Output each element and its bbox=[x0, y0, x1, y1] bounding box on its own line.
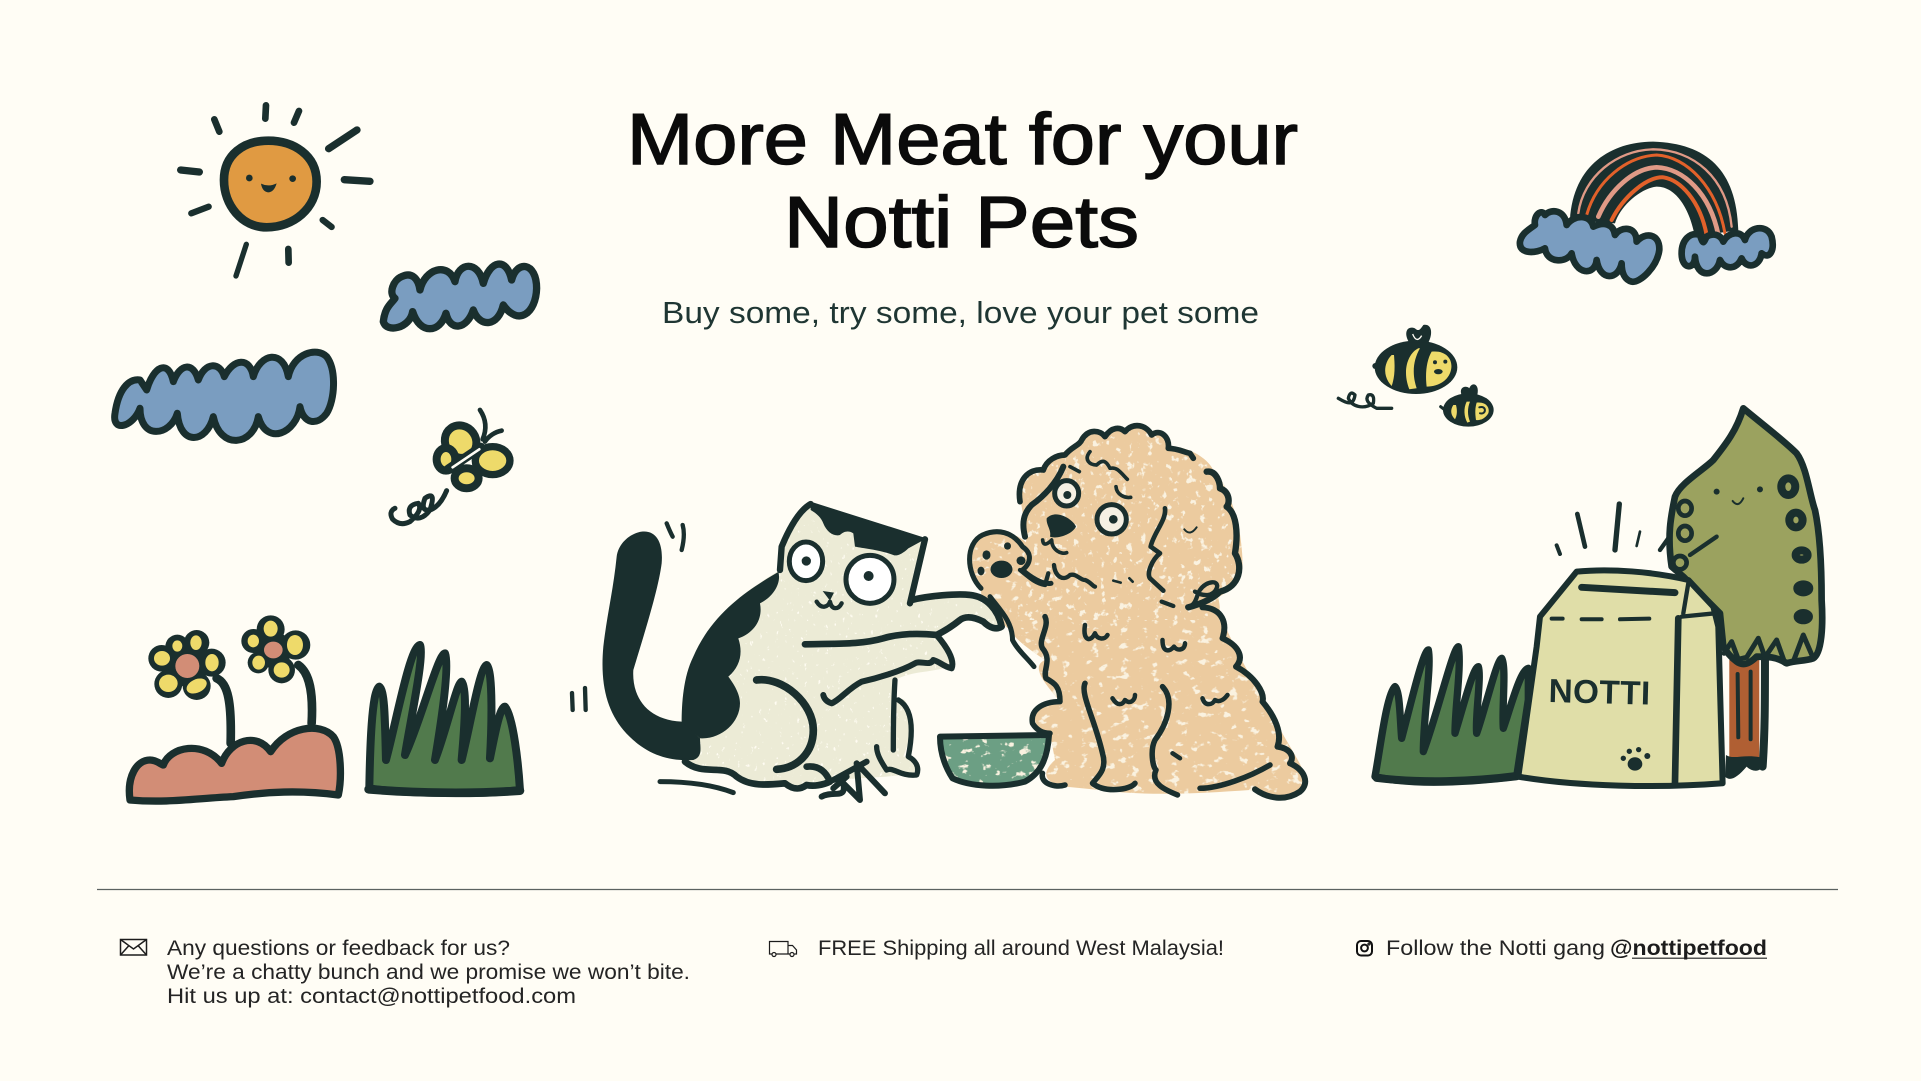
icon: envelope bbox=[120, 940, 146, 955]
title bbox=[627, 100, 1298, 263]
bag label: NOTTI bbox=[1548, 673, 1651, 713]
footer: shipping bbox=[770, 936, 1224, 960]
icon: small bee bbox=[1441, 384, 1494, 427]
title: Notti Pets bbox=[784, 183, 1139, 263]
contact text bbox=[167, 936, 690, 1008]
cat face bbox=[780, 504, 925, 608]
subtitle: Buy some, try some, love your pet some bbox=[662, 295, 1259, 330]
illustration: grass, tree and food bag bbox=[1375, 408, 1822, 786]
illustration: water bowl bbox=[940, 735, 1049, 786]
contact text: Hit us up at: contact@nottipetfood.com bbox=[167, 984, 576, 1008]
icon: rainbow left cloud bbox=[1520, 211, 1659, 282]
icon: tree trunk bbox=[1725, 657, 1765, 779]
illustration: black and white cat bbox=[572, 502, 1002, 800]
dog fur head bbox=[1017, 425, 1243, 620]
illustration: poodle dog bbox=[970, 425, 1305, 798]
rainbow and bees: right bbox=[1338, 142, 1773, 427]
icon: tree with smile bbox=[1660, 408, 1822, 664]
paw print bbox=[1621, 747, 1650, 771]
icon: large bee bbox=[1338, 325, 1457, 408]
dog fur body bbox=[970, 531, 1305, 796]
flowers and grass: left bbox=[129, 615, 520, 801]
cat limbs bbox=[572, 523, 1002, 800]
icon: instagram bbox=[1357, 941, 1372, 956]
shipping text: FREE Shipping all around West Malaysia! bbox=[818, 936, 1224, 960]
icon: butterfly bbox=[391, 410, 510, 524]
icon: sun bbox=[181, 105, 370, 276]
icon: small cloud bbox=[383, 264, 537, 329]
icon: large cloud bbox=[115, 352, 334, 440]
contact text: We’re a chatty bunch and we promise we won’t bite. bbox=[167, 960, 690, 984]
footer: social bbox=[1357, 936, 1767, 960]
icon: grass clump bbox=[369, 645, 520, 793]
social text: Follow the Notti gang bbox=[1386, 936, 1605, 960]
contact text: Any questions or feedback for us? bbox=[167, 936, 510, 960]
divider bbox=[97, 888, 1838, 890]
cat body bbox=[682, 504, 1002, 786]
footer: contact bbox=[120, 936, 690, 1008]
icon: flowers on mound bbox=[129, 615, 340, 801]
cat markings and tail bbox=[602, 502, 927, 760]
instagram handle: @nottipetfood bbox=[1610, 936, 1767, 960]
icon: rainbow right cloud bbox=[1682, 228, 1773, 273]
icon: rainbow bbox=[1570, 142, 1738, 237]
dog body lines bbox=[970, 532, 1305, 798]
icon: notti food bag bbox=[1518, 504, 1723, 786]
icon: truck bbox=[770, 942, 796, 956]
title: More Meat for your bbox=[627, 100, 1298, 180]
sky illustrations: left bbox=[115, 105, 537, 524]
icon: grass bbox=[1375, 647, 1528, 782]
dog face bbox=[1019, 426, 1239, 607]
